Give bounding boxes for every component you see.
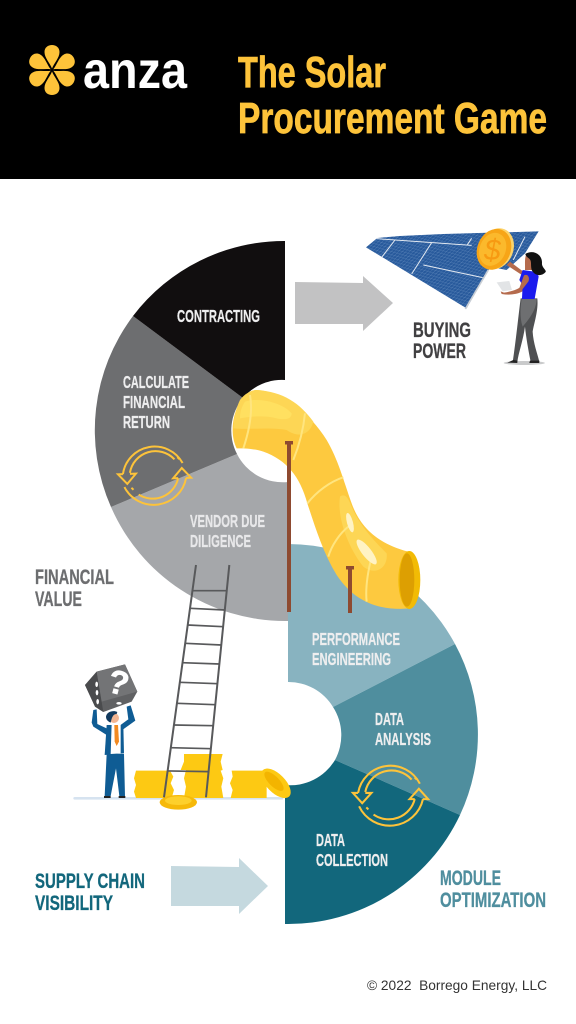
ladder: [164, 565, 229, 797]
top: [519, 270, 539, 299]
slide support poles: [285, 441, 354, 613]
head: [525, 255, 533, 270]
arms: [92, 709, 107, 735]
label: financial value: [35, 565, 114, 611]
label: contracting: CONTRACTING: [177, 306, 260, 326]
label: performance engineering: [312, 629, 400, 669]
label: performance engineering: PERFORMANCE: [312, 629, 400, 649]
arms: [501, 275, 531, 295]
segment: contracting: [133, 241, 285, 398]
segment labels: [123, 306, 431, 870]
label: calculate financial return: FINANCIAL: [123, 392, 185, 412]
label: vendor due diligence: VENDOR DUE: [190, 511, 265, 531]
icon: cycle arrows data: [353, 766, 428, 826]
head: [109, 713, 119, 723]
label: module optimization: MODULE: [440, 866, 501, 890]
logo wordmark: anza: [83, 42, 188, 100]
icon: anza flower logo: [27, 45, 77, 95]
illustration: solar panels: [366, 231, 539, 309]
illustration: woman holding coin: [497, 252, 546, 365]
label: data collection: COLLECTION: [316, 850, 388, 870]
copyright: © 2022 Borrego Energy, LLC: [367, 977, 547, 993]
label: vendor due diligence: [190, 511, 265, 551]
segment: data collection: [285, 760, 460, 924]
man: [92, 705, 135, 798]
label: supply chain visibility: [35, 869, 145, 915]
ground shadow: [504, 361, 545, 365]
icon: cycle arrows financial: [117, 445, 192, 506]
tie: [114, 725, 119, 746]
label: data analysis: [375, 709, 431, 749]
label: module optimization: [440, 866, 546, 912]
illustration: man, dice, coins and ladder: [73, 565, 296, 810]
label: data analysis: DATA: [375, 709, 404, 729]
arrow: supply chain visibility: [171, 858, 268, 914]
hair: [106, 711, 117, 723]
panel: financial value semicircle: [95, 241, 288, 621]
label: supply chain visibility: VISIBILITY: [35, 891, 113, 915]
tablet: [497, 281, 512, 291]
label: buying power: [413, 318, 471, 363]
title: The Solar: [238, 48, 386, 97]
label: buying power: POWER: [413, 339, 466, 363]
label: financial value: FINANCIAL: [35, 565, 114, 589]
illustration: gold coin: $: [483, 234, 502, 267]
label: financial value: VALUE: [35, 587, 82, 611]
label: performance engineering: ENGINEERING: [312, 649, 391, 669]
floor shadow: [73, 797, 283, 800]
yellow slide pipe: [233, 390, 420, 609]
pipe mouth: [398, 551, 420, 609]
hair: [525, 252, 546, 275]
shirt: [111, 723, 121, 754]
tilted coin: [256, 764, 296, 803]
trousers: [105, 754, 125, 796]
label: data collection: DATA: [316, 830, 345, 850]
label: vendor due diligence: DILIGENCE: [190, 531, 251, 551]
panel: module optimization semicircle: [285, 544, 478, 924]
title: [238, 48, 547, 143]
shoes: [507, 360, 539, 363]
arrow: to buying power: [295, 276, 393, 331]
segment: data analysis: [333, 644, 478, 815]
label: supply chain visibility: SUPPLY CHAIN: [35, 869, 145, 893]
flat coin: [160, 795, 197, 810]
coins: [134, 754, 267, 798]
question mark: ?: [104, 663, 133, 704]
label: calculate financial return: CALCULATE: [123, 372, 189, 392]
label: data collection: [316, 830, 388, 870]
segment: vendor due diligence: [111, 454, 288, 621]
jacket: [105, 725, 124, 755]
dice: [85, 663, 137, 712]
label: calculate financial return: [123, 372, 189, 432]
shoes: [104, 796, 125, 798]
label: buying power: BUYING: [413, 318, 471, 342]
illustration: gold coin: [471, 223, 520, 275]
segment: calculate financial return: [95, 316, 243, 507]
header band: [0, 0, 576, 179]
label: data analysis: ANALYSIS: [375, 729, 431, 749]
segment: performance engineering: [288, 544, 455, 707]
label: calculate financial return: RETURN: [123, 412, 170, 432]
legs: [513, 298, 539, 362]
